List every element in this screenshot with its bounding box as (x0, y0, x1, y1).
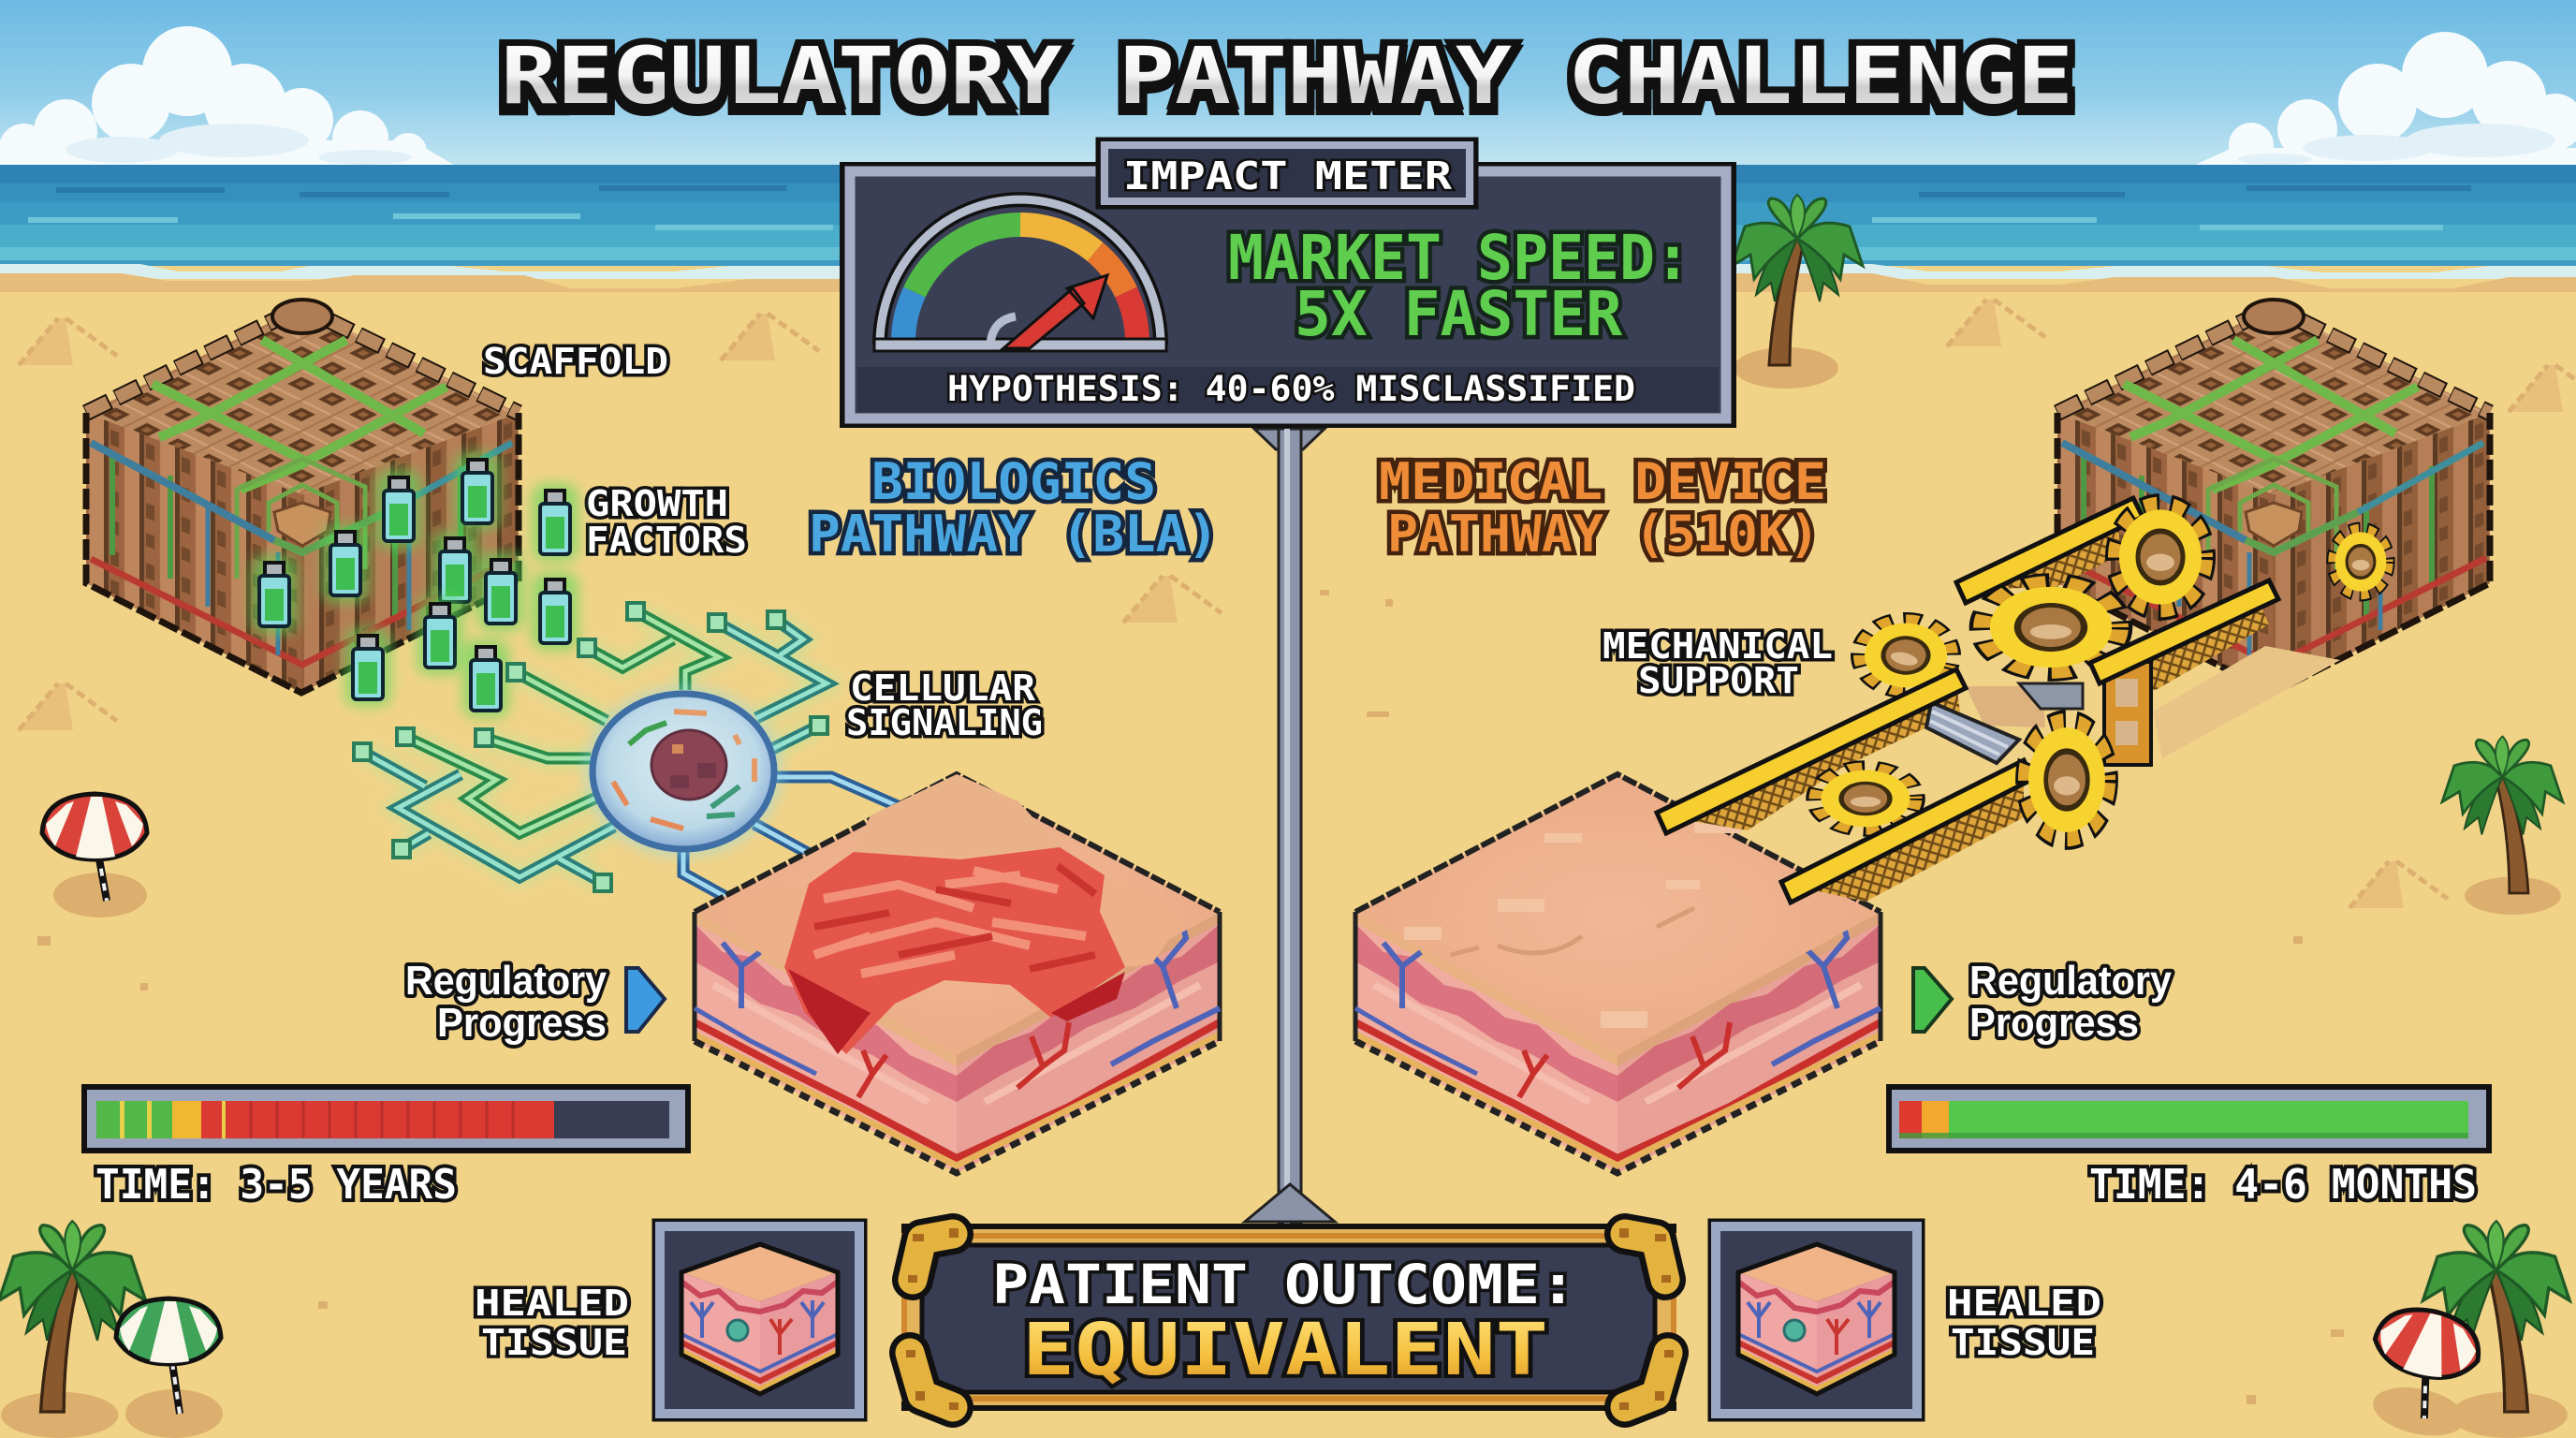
gear: on scaffold (2334, 530, 2388, 594)
label: cellular signaling (846, 668, 1043, 743)
market speed text: 5X FASTER (1295, 278, 1622, 350)
hydraulic cylinder (1926, 683, 2083, 763)
cellular signaling network (354, 603, 921, 908)
arrow: left progress (626, 968, 665, 1032)
left scaffold (86, 300, 519, 693)
card: healed tissue right (1710, 1221, 1923, 1419)
card: healed tissue left (654, 1221, 865, 1419)
label: growth factors: GROWTH (586, 483, 728, 524)
heading: biologics pathway: BIOLOGICS (871, 452, 1156, 511)
label: healed tissue right: TISSUE (1951, 1322, 2095, 1363)
umbrella: left red (42, 794, 147, 917)
left regulatory progress label: Regulatory (405, 958, 607, 1004)
panel: impact meter (842, 139, 1734, 425)
time: biologics: TIME: 3-5 YEARS (95, 1161, 457, 1209)
progress bar: biologics (84, 1087, 688, 1151)
lattice trusses (1965, 521, 2119, 590)
label: healed tissue left (475, 1283, 629, 1363)
label: mechanical support: SUPPORT (1638, 660, 1799, 701)
meter tab (1098, 139, 1476, 207)
gold corner ornaments outline (910, 1234, 1668, 1407)
palm: bottom left (0, 1221, 146, 1438)
label: cellular signaling: CELLULAR (850, 668, 1035, 709)
heading: medical device pathway: MEDICAL DEVICE (1379, 452, 1826, 511)
right regulatory progress label (1969, 958, 2172, 1046)
gauge (874, 199, 1166, 351)
heading: biologics pathway: PATHWAY (BLA) (809, 505, 1219, 564)
palm: bottom right (2422, 1221, 2569, 1438)
beam: lower front (1781, 760, 2033, 902)
panel frame (842, 165, 1734, 425)
growth factor vials (251, 452, 578, 718)
gear: small flat (1818, 769, 1913, 829)
blue connectors to wound (683, 777, 921, 908)
cell (584, 685, 783, 858)
gauge needle (1003, 275, 1107, 348)
right regulatory progress label: Progress (1969, 1000, 2139, 1046)
mechanical support rig (1657, 498, 2388, 902)
market speed text: MARKET SPEED: (1228, 222, 1690, 294)
time: device: TIME: 4-6 MONTHS (2089, 1161, 2477, 1209)
heading: medical device pathway: PATHWAY (510K) (1387, 505, 1820, 564)
progress bar: device (1889, 1087, 2489, 1151)
background: cloud left (0, 26, 454, 172)
label: healed tissue right (1947, 1283, 2101, 1363)
label: healed tissue right: HEALED (1947, 1283, 2101, 1324)
circuit glow (362, 611, 827, 883)
green and teal circuit highlights (405, 611, 719, 833)
outcome text: PATIENT OUTCOME: (992, 1253, 1576, 1316)
background: shoreline foam (0, 264, 2576, 292)
right regulatory progress label: Regulatory (1969, 958, 2172, 1004)
arrow: right progress (1913, 968, 1952, 1032)
label: growth factors (586, 483, 747, 561)
palm: upper centre (1732, 195, 1863, 389)
left regulatory progress label (405, 958, 607, 1046)
beam: upper front (1657, 669, 1966, 833)
meter tab: IMPACT METER (1123, 154, 1452, 198)
gear: tall (2116, 506, 2204, 608)
left regulatory progress label: Progress (437, 1000, 607, 1046)
sand mounds (19, 300, 2576, 1404)
gear: rear left (1850, 611, 1962, 699)
background: sky (0, 0, 2576, 167)
gear: front large (1985, 584, 2116, 670)
background: cloud right (2195, 32, 2576, 168)
background: ocean (0, 165, 2576, 272)
label: scaffold: SCAFFOLD (483, 341, 668, 382)
beam: upper rear (1956, 498, 2143, 603)
label: growth factors: FACTORS (586, 520, 747, 561)
heading: biologics pathway (809, 452, 1219, 564)
wound (725, 774, 1181, 1054)
label: healed tissue left: HEALED (475, 1283, 629, 1324)
label: cellular signaling: SIGNALING (846, 702, 1043, 743)
central pole (1245, 429, 1335, 1225)
equivalent text: EQUIVALENT (1022, 1309, 1548, 1392)
umbrella: right red (2358, 1300, 2486, 1438)
green and teal circuit outlines (405, 611, 719, 833)
palm: right middle (2442, 737, 2563, 915)
panel: patient outcome (904, 1226, 1674, 1410)
title: REGULATORY PATHWAY CHALLENGE (501, 30, 2073, 122)
label: mechanical support (1603, 625, 1833, 701)
gear: tall front (2026, 724, 2108, 836)
wounded tissue block (695, 774, 1220, 1173)
beam: lower rear (2090, 580, 2278, 683)
rear frame (2104, 662, 2151, 765)
rig shadow (2153, 646, 2340, 758)
hypothesis text: HYPOTHESIS: 40-60% MISCLASSIFIED (947, 369, 1635, 409)
circuit nodes (354, 603, 827, 891)
right scaffold (2057, 300, 2490, 693)
intact tissue block (1355, 774, 1881, 1173)
heading: medical device pathway (1379, 452, 1826, 564)
label: healed tissue left: TISSUE (481, 1322, 627, 1363)
label: mechanical support: MECHANICAL (1603, 625, 1833, 667)
gold corner ornaments fill (910, 1234, 1668, 1407)
market speed text (1228, 222, 1690, 350)
umbrella: green (116, 1299, 223, 1438)
